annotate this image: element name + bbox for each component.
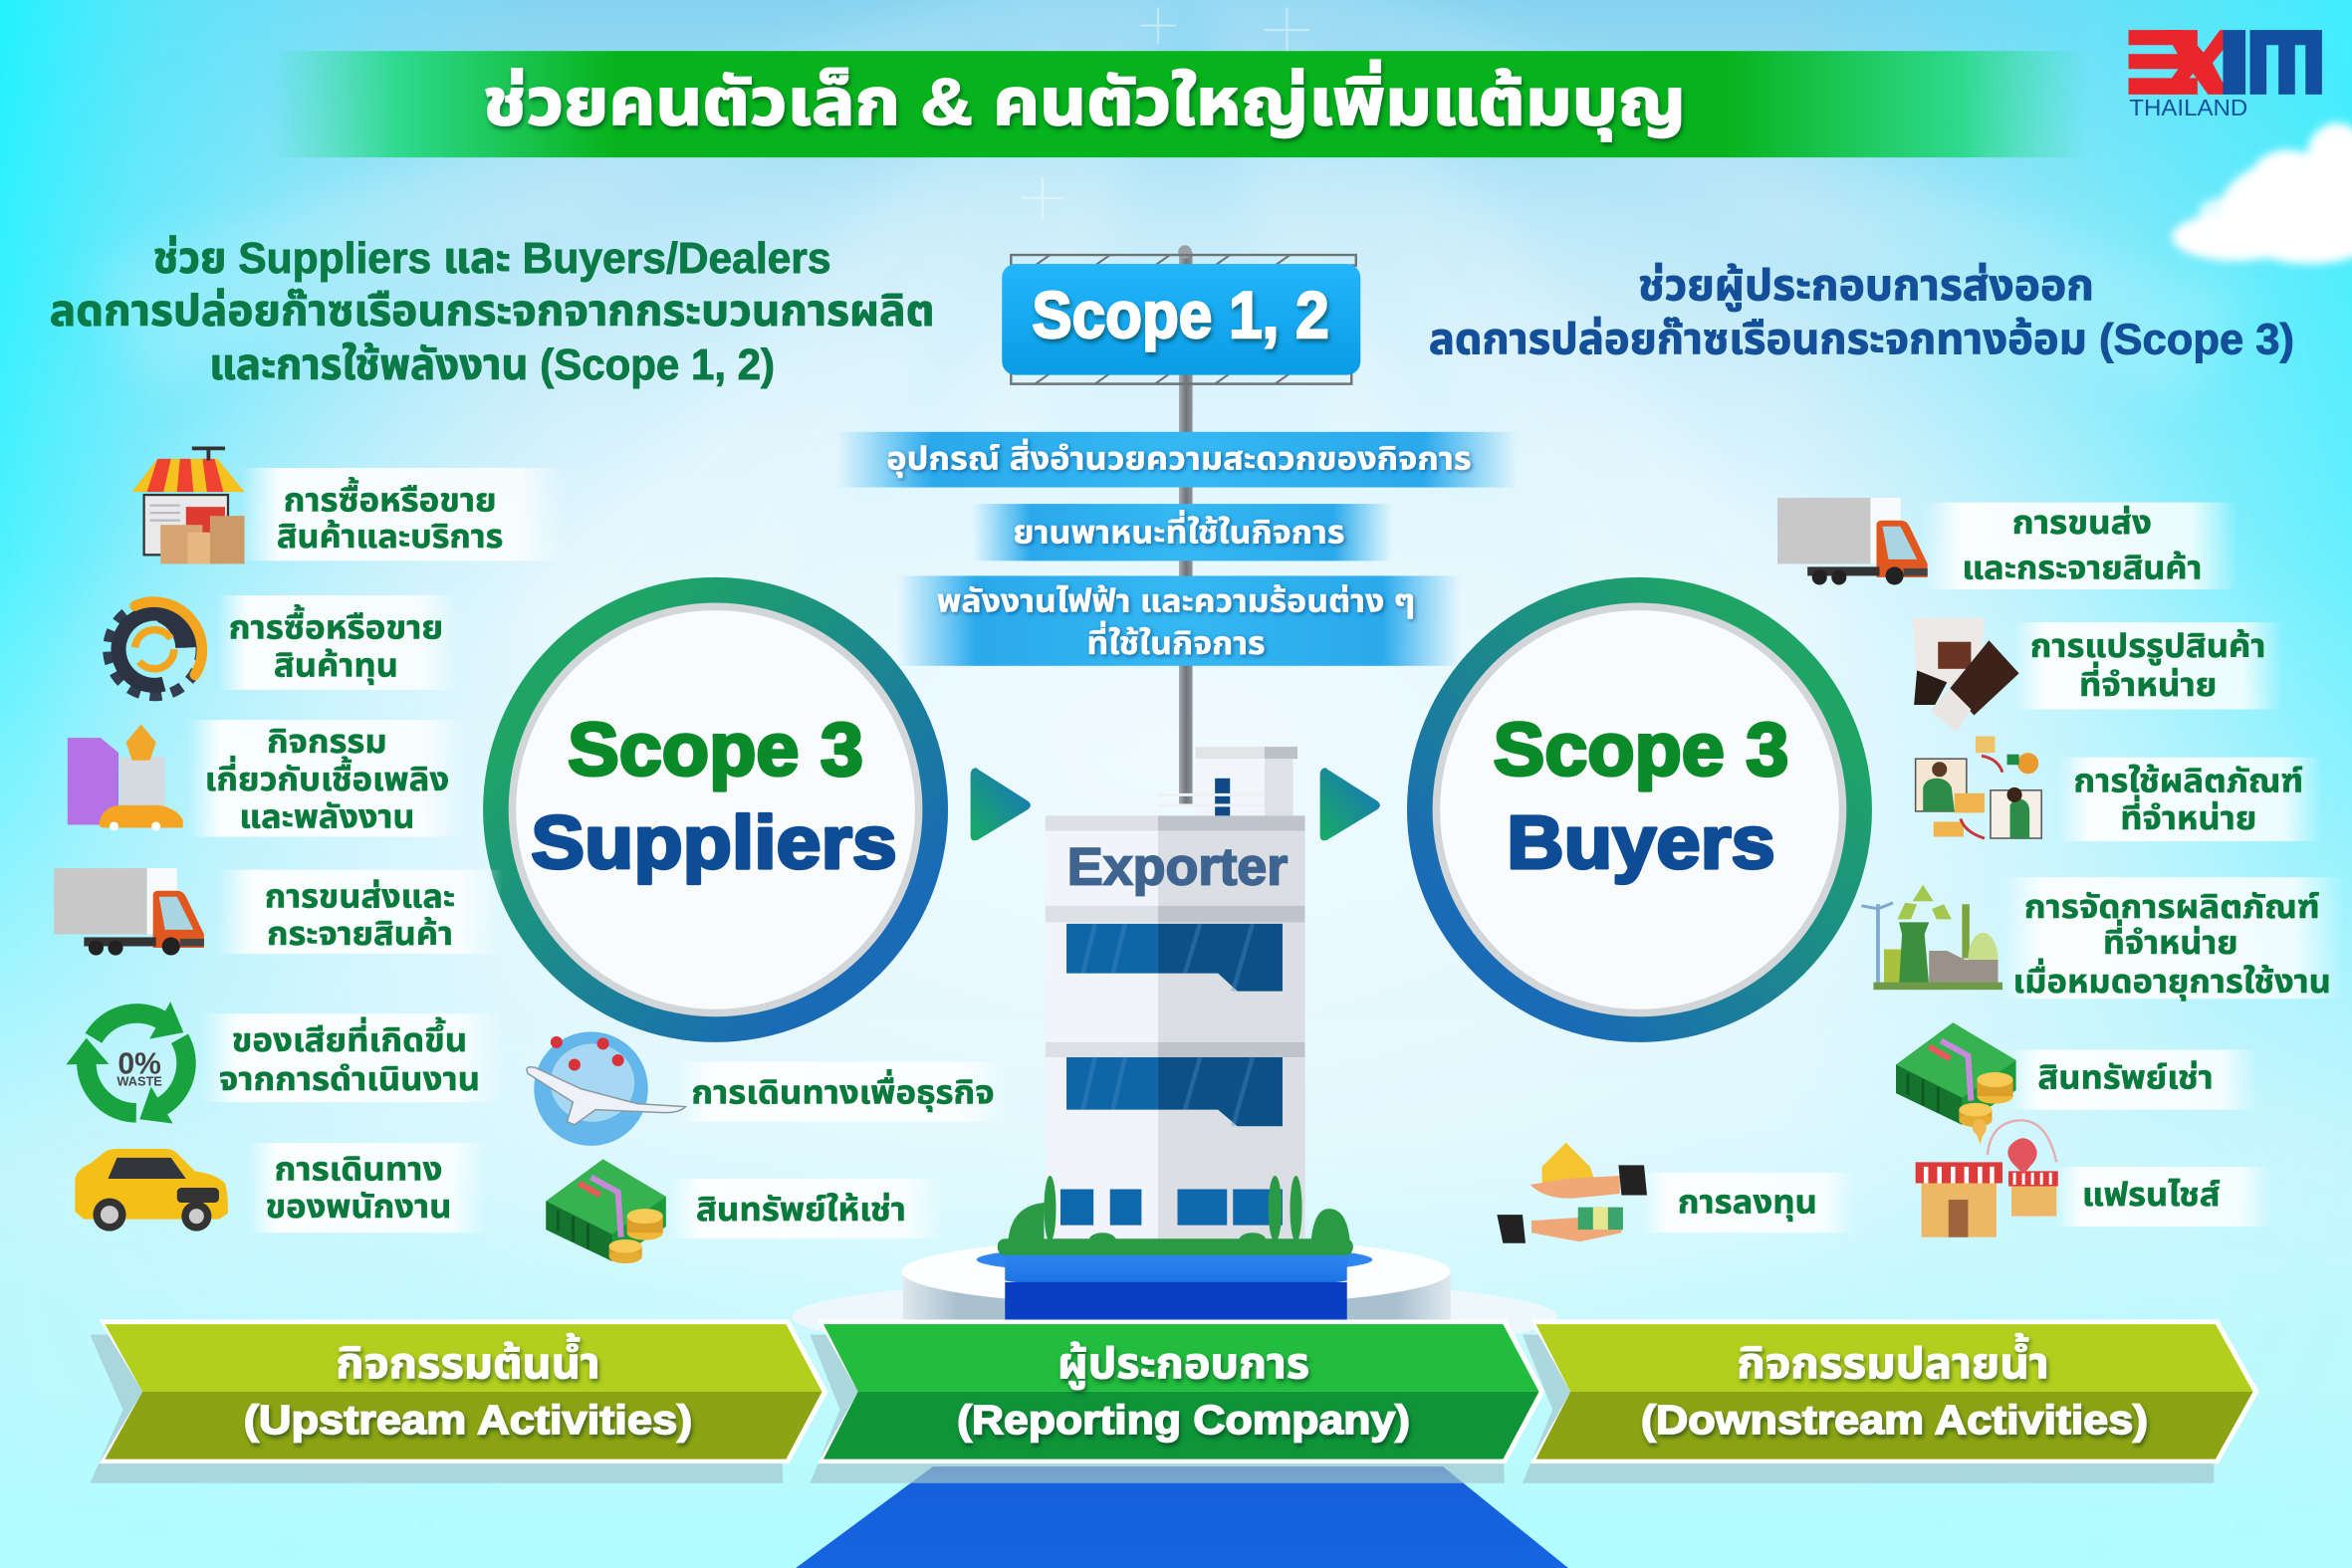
billboard text: Scope 1, 2: [1032, 279, 1329, 352]
icon: recycle zero waste: WASTE: [117, 1074, 162, 1089]
icon: money: [546, 1159, 666, 1263]
icon: gear: [108, 602, 202, 696]
item: leased assets downstream: [1896, 1022, 2257, 1127]
label: [277, 477, 503, 556]
icon: green factory: [1861, 885, 2002, 990]
item: operational waste: [60, 1002, 503, 1135]
label: [266, 1151, 451, 1226]
label: การแปรรูปสินค้า: [2030, 628, 2265, 666]
icon: recycle zero waste: 0%: [118, 1048, 161, 1081]
label: [2074, 763, 2303, 837]
strip: facilities: อุปกรณ์ สิ่งอำนวยความสะดวกของกิจการ: [886, 438, 1472, 477]
platform: [792, 1237, 1557, 1356]
banner: downstream activities: กิจกรรมปลายน้ำ: [1737, 1332, 2049, 1388]
label: ของพนักงาน: [266, 1189, 451, 1226]
banner: downstream activities: (Downstream Activities): [1641, 1397, 2148, 1443]
heading: left description: ช่วย Suppliers และ Buyers/Dealers: [153, 234, 831, 283]
label: เกี่ยวกับเชื้อเพลิง: [205, 756, 449, 798]
strip: electricity and heat: ที่ใช้ในกิจการ: [1086, 621, 1266, 661]
label: ที่จำหน่าย: [2120, 794, 2256, 837]
item: business travel: [527, 1031, 1008, 1146]
icon: online shop: [132, 448, 245, 563]
label: ที่จำหน่าย: [2079, 661, 2217, 704]
strip: vehicles: ยานพาหนะที่ใช้ในกิจการ: [1014, 510, 1344, 550]
label: เมื่อหมดอายุการใช้งาน: [2013, 958, 2331, 1002]
strip: facilities: [837, 432, 1518, 488]
label: การขนส่ง: [2012, 505, 2152, 542]
label: การเดินทาง: [275, 1151, 442, 1188]
circle: Scope 3 Suppliers: Scope 3: [568, 708, 863, 791]
label: การซื้อหรือขาย: [284, 477, 497, 520]
title banner: [270, 51, 2088, 157]
banner: upstream activities: กิจกรรมต้นน้ำ: [336, 1332, 600, 1388]
item: processing of sold products: [1913, 618, 2283, 732]
label: สินทรัพย์ให้เช่า: [696, 1192, 906, 1229]
label: [219, 1016, 480, 1098]
heading: left description: [50, 234, 934, 389]
item: purchased goods and services: [132, 448, 567, 563]
label: ที่จำหน่าย: [2103, 919, 2238, 962]
label: จากการดำเนินงาน: [219, 1061, 480, 1098]
item: investments: [1497, 1143, 1855, 1243]
circle: Scope 3 Buyers: Buyers: [1507, 800, 1775, 884]
billboard: Scope 1, 2: [1002, 255, 1360, 384]
banner: reporting company: [810, 1320, 1545, 1483]
circle: Scope 3 Buyers: Scope 3: [1494, 708, 1788, 791]
banner: downstream activities: [1523, 1320, 2259, 1483]
label: และพลังงาน: [239, 798, 415, 835]
item: use of sold products: [1916, 737, 2322, 841]
label: กระจายสินค้า: [267, 916, 453, 953]
item: end of life treatment: [1861, 877, 2344, 1002]
icon: truck: [54, 868, 204, 956]
heading: left description: ลดการปล่อยก๊าซเรือนกระจกจากกระบวนการผลิต: [50, 287, 934, 336]
icon: energy: [68, 725, 183, 830]
banner: reporting company: ผู้ประกอบการ: [1058, 1339, 1309, 1390]
heading: left description: และการใช้พลังงาน (Scope 1, 2): [209, 340, 775, 389]
label: สินค้าทุน: [274, 647, 398, 685]
label: สินทรัพย์เช่า: [2037, 1060, 2214, 1097]
arrow: exporter to buyers: [1320, 768, 1380, 840]
strip: electricity and heat: พลังงานไฟฟ้า และความร้อนต่าง ๆ: [937, 583, 1415, 619]
icon: truck: [1777, 498, 1928, 584]
label: แฟรนไชส์: [2082, 1177, 2221, 1214]
heading: right description: ลดการปล่อยก๊าซเรือนกระจกทางอ้อม (Scope 3): [1429, 315, 2294, 363]
title text: ช่วยคนตัวเล็ก & คนตัวใหญ่เพิ่มแต้มบุญ: [483, 60, 1686, 141]
icon: seller and buyer: [1916, 737, 2041, 838]
icon: money: [1896, 1022, 2016, 1127]
icon: hands exchanging money: [1497, 1143, 1647, 1243]
label: กิจกรรม: [267, 724, 387, 761]
label: [229, 604, 443, 685]
building label: Exporter: [1067, 838, 1288, 897]
label: การจัดการผลิตภัณฑ์: [2024, 889, 2320, 926]
label: สินค้าและบริการ: [277, 519, 503, 556]
label: [2013, 889, 2331, 1002]
item: franchises: [1916, 1119, 2272, 1237]
circle: Scope 3 Suppliers: Suppliers: [531, 800, 897, 884]
arrow: suppliers to exporter: [971, 768, 1031, 840]
heading: right description: ช่วยผู้ประกอบการส่งออก: [1638, 261, 2094, 312]
icon: recycle zero waste: [60, 1002, 211, 1135]
icon: franchise shops: [1916, 1119, 2058, 1237]
item: downstream transport: [1777, 498, 2238, 589]
logo: EXIM Thailand: [2129, 30, 2322, 120]
item: fuel and energy: [68, 720, 465, 837]
label: การขนส่งและ: [265, 878, 455, 915]
label: [2030, 628, 2265, 704]
banner: upstream activities: (Upstream Activities): [244, 1397, 692, 1443]
circle: Scope 3 Suppliers: [483, 577, 948, 1042]
item: capital goods: [108, 595, 457, 696]
item: employee commuting: [75, 1143, 488, 1232]
trees and lawn: [998, 1176, 1353, 1255]
pole: [1178, 245, 1193, 805]
item: upstream transport: [54, 868, 503, 956]
label: [205, 724, 449, 835]
circle: Scope 3 Buyers: [1407, 577, 1872, 1042]
item: leased assets upstream: [546, 1159, 945, 1263]
label: การเดินทางเพื่อธุรกิจ: [691, 1069, 995, 1113]
icon: snack packs: [1913, 618, 2019, 732]
banner: reporting company: (Reporting Company): [957, 1397, 1410, 1443]
banner: upstream activities: [90, 1320, 828, 1483]
strip: vehicles: [972, 504, 1392, 560]
icon: plane and globe: [527, 1031, 685, 1146]
blue road at the bottom: [795, 1466, 1569, 1568]
logo: EXIM Thailand: THAILAND: [2129, 95, 2247, 120]
label: การซื้อหรือขาย: [229, 604, 443, 647]
strip: electricity and heat: [897, 575, 1461, 666]
building: Exporter: [998, 747, 1353, 1255]
label: และกระจายสินค้า: [1962, 550, 2202, 586]
label: [1962, 505, 2202, 586]
label: การใช้ผลิตภัณฑ์: [2074, 763, 2303, 799]
label: [265, 878, 455, 953]
heading: right description: [1429, 261, 2294, 363]
icon: yellow car: [75, 1149, 228, 1232]
label: ของเสียที่เกิดขึ้น: [232, 1016, 467, 1059]
label: การลงทุน: [1678, 1185, 1817, 1223]
